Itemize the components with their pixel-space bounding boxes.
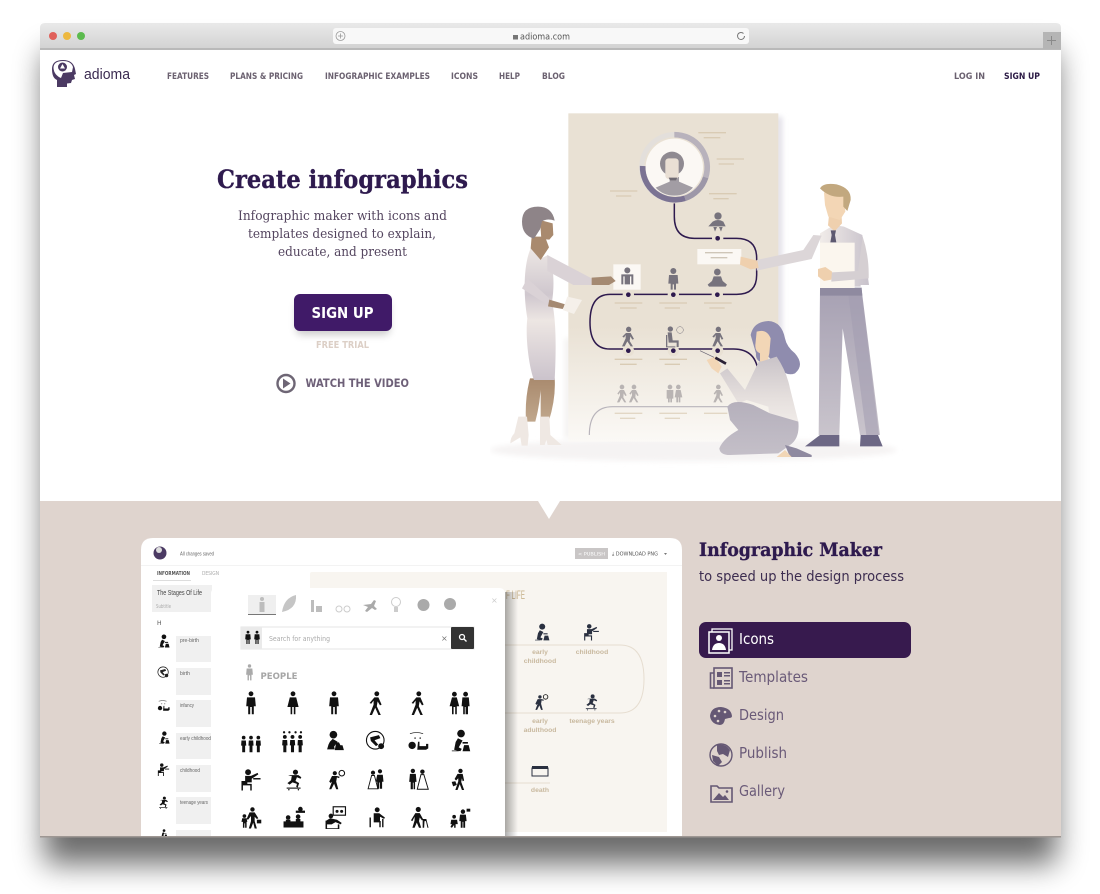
timeline path — [590, 203, 758, 374]
lower arm with tablet — [522, 278, 582, 314]
pants — [719, 402, 799, 455]
pen — [700, 351, 726, 364]
nav links: FEATURES — [167, 72, 209, 82]
canvas preview: F LIFE — [506, 588, 525, 602]
search box: Search for anything — [269, 635, 330, 643]
preview labels: childhood — [524, 658, 556, 665]
lower beige section — [40, 501, 1061, 837]
hand — [707, 357, 722, 373]
crouching woman — [700, 321, 812, 457]
arm pointing — [547, 255, 592, 285]
people heading — [246, 664, 298, 682]
small label card — [697, 249, 741, 264]
templates menu item — [710, 668, 808, 688]
navigation header — [52, 60, 1040, 87]
nav links: PLANS & PRICING — [230, 72, 303, 82]
nav links: LOG IN — [954, 72, 985, 82]
walking icon right — [712, 327, 723, 346]
preview labels: early — [532, 718, 548, 725]
left information panel: childhood — [180, 768, 200, 774]
left information panel: INFORMATION — [157, 571, 190, 577]
infographic poster — [565, 113, 782, 442]
publish menu item: Publish — [739, 744, 787, 762]
meditation icon — [708, 269, 727, 287]
nav links: INFOGRAPHIC EXAMPLES — [325, 72, 430, 82]
hero heading: Create infographics — [217, 165, 468, 195]
legs and boots — [510, 378, 562, 446]
logo — [52, 60, 131, 87]
logo: adioma — [84, 66, 131, 83]
walking icon — [622, 327, 634, 346]
belt shade — [820, 288, 862, 296]
standing man — [740, 184, 883, 446]
section heading: Infographic Maker — [699, 540, 882, 561]
templates menu item: Templates — [738, 668, 808, 686]
sign up button: SIGN UP — [312, 304, 374, 322]
icons menu item — [699, 622, 911, 658]
design menu item — [710, 706, 784, 725]
left information panel: DESIGN — [202, 571, 219, 577]
left information panel: Subtitle — [156, 604, 171, 610]
portrait ring — [642, 135, 707, 200]
canvas preview — [310, 572, 667, 837]
gallery menu item — [711, 782, 785, 802]
sweater — [720, 357, 798, 422]
hair — [522, 207, 555, 239]
free trial label: FREE TRIAL — [316, 340, 370, 351]
person icon — [668, 268, 678, 290]
left information panel — [152, 571, 219, 837]
nav links: HELP — [499, 72, 520, 82]
app screenshot card — [141, 538, 682, 837]
app top bar: ⤓ DOWNLOAD PNG — [612, 552, 658, 558]
preview labels: death — [531, 787, 549, 794]
watch the video link — [278, 375, 409, 392]
clipboard — [820, 243, 855, 288]
foot and shoe — [785, 445, 812, 457]
left information panel: H — [157, 620, 162, 627]
left information panel: pre-birth — [180, 638, 199, 644]
preview labels: teenage years — [569, 718, 615, 725]
app top bar: All changes saved — [180, 552, 214, 558]
hair — [820, 184, 851, 211]
trousers — [819, 290, 880, 435]
nav links — [167, 72, 1040, 82]
timeline dots — [623, 233, 723, 356]
outstretched arm — [757, 235, 822, 271]
nav links: SIGN UP — [1004, 72, 1040, 82]
preview icons — [532, 624, 599, 776]
app top bar — [141, 546, 682, 566]
shirt torso — [820, 225, 869, 287]
left information panel: teenage years — [180, 800, 208, 806]
torso card — [613, 264, 641, 290]
hair back — [751, 321, 800, 374]
shoes — [805, 435, 883, 446]
search box — [241, 627, 474, 649]
left information panel: infancy — [180, 703, 194, 709]
floor shadow — [490, 439, 897, 461]
sign up button — [294, 294, 392, 335]
browser title bar: adioma.com — [520, 32, 570, 42]
text placeholder lines — [610, 133, 744, 418]
tie — [830, 230, 836, 242]
app top bar: < PUBLISH — [578, 552, 605, 558]
faded people icons — [617, 385, 723, 402]
faded lower timeline — [589, 407, 729, 435]
standing woman — [510, 207, 616, 446]
icons menu item: Icons — [739, 630, 774, 648]
left information panel: The Stages Of Life — [157, 588, 202, 597]
window bottom edge — [40, 836, 1061, 838]
icon picker modal — [211, 588, 505, 837]
people heading: PEOPLE — [260, 672, 298, 682]
watch the video link: WATCH THE VIDEO — [306, 376, 409, 390]
preview labels: early — [532, 649, 548, 656]
design menu item: Design — [739, 706, 784, 724]
preview labels: childhood — [576, 649, 608, 656]
dress — [525, 248, 556, 380]
arm holding clipboard — [831, 237, 869, 282]
feature menu — [699, 622, 911, 802]
hero subtitle: Infographic maker with icons and — [238, 209, 447, 224]
hero illustration — [490, 113, 897, 461]
waiting icon — [666, 326, 683, 347]
search box: × — [441, 634, 448, 643]
hero subtitle: templates designed to explain, — [248, 227, 436, 242]
nav links: ICONS — [451, 72, 478, 82]
hero subtitle: educate, and present — [278, 245, 408, 260]
left information panel: early childhood — [180, 736, 211, 742]
category tabs — [248, 595, 456, 615]
modal close: × — [491, 596, 498, 605]
preview labels: adulthood — [524, 727, 556, 734]
nav links: BLOG — [542, 72, 565, 82]
neck and head — [828, 212, 842, 231]
section subtitle: to speed up the design process — [699, 569, 904, 585]
baby icon — [708, 212, 726, 232]
modal drop shadow — [505, 592, 518, 837]
gallery menu item: Gallery — [739, 782, 785, 800]
people icon grid — [241, 691, 470, 829]
preview labels — [524, 649, 615, 794]
neck and face — [531, 237, 549, 260]
face — [755, 331, 771, 362]
browser title bar — [40, 23, 1061, 50]
publish menu item — [710, 744, 787, 766]
left information panel: birth — [180, 671, 190, 677]
hero subtitle — [238, 209, 447, 260]
